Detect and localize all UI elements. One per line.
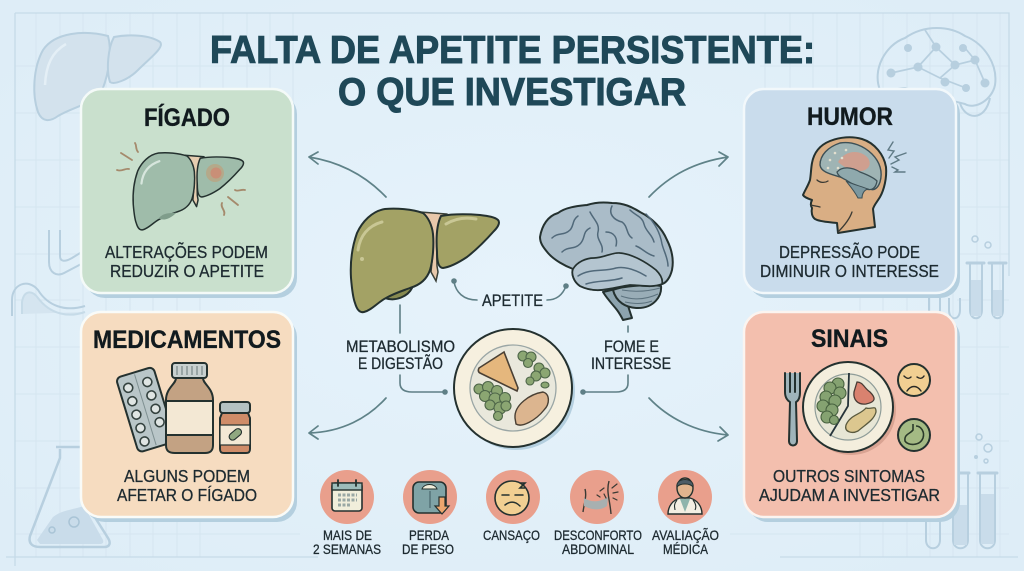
label: cansaço: CANSAÇO (483, 528, 540, 543)
icon: scale (403, 470, 457, 524)
label: apetite: APETITE (482, 292, 543, 310)
text: humor (760, 241, 939, 281)
connector: fome (580, 326, 628, 395)
central plate with food (454, 329, 575, 450)
title (210, 29, 815, 114)
text: medicamentos: AFETAR O FÍGADO (117, 485, 257, 505)
background icon: stomach (12, 230, 85, 316)
background icon: test tubes bottom (926, 434, 997, 548)
panel: fígado (81, 89, 297, 298)
text: fígado: ALTERAÇÕES PODEM (105, 241, 268, 262)
label: metabolismo e digestão: E DIGESTÃO (358, 353, 443, 373)
label: desconforto abdominal: DESCONFORTO (554, 528, 642, 543)
label: metabolismo e digestão (346, 338, 455, 373)
background icon: brain network (878, 28, 995, 116)
background icon: flask (30, 447, 110, 547)
central liver (351, 209, 499, 312)
label: perda de peso: PERDA (409, 528, 449, 543)
text: medicamentos (117, 466, 257, 505)
label: fome e interesse: INTERESSE (591, 355, 671, 373)
text: medicamentos: ALGUNS PODEM (124, 466, 250, 486)
background icon: test tubes top (929, 236, 1006, 318)
icon: medication (116, 363, 250, 453)
icon: sad face (898, 364, 930, 396)
text: sinais: OUTROS SINTOMAS (773, 466, 925, 486)
heading: medicamentos: MEDICAMENTOS (93, 326, 281, 354)
title: O QUE INVESTIGAR (338, 71, 686, 114)
label: mais de 2 semanas: MAIS DE (323, 528, 372, 543)
icon: tired face (486, 470, 540, 524)
icon: abdominal discomfort (570, 470, 624, 524)
panel: humor (744, 89, 960, 298)
label: fome e interesse (591, 338, 671, 373)
icon: head with brain (803, 137, 906, 233)
text: sinais (759, 466, 940, 505)
icon: stomach badge (898, 419, 930, 451)
label: mais de 2 semanas: 2 SEMANAS (313, 542, 381, 557)
icon: fork (785, 373, 800, 446)
heading: sinais: SINAIS (811, 325, 888, 353)
label: avaliação médica: MÉDICA (663, 542, 708, 557)
label: metabolismo e digestão: METABOLISMO (346, 338, 455, 356)
title: FALTA DE APETITE PERSISTENTE: (210, 29, 815, 72)
text: sinais: AJUDAM A INVESTIGAR (759, 485, 940, 505)
icon: liver with lesion (117, 143, 245, 230)
connector: metabolismo (400, 305, 448, 395)
text: fígado: REDUZIR O APETITE (110, 261, 264, 281)
label: perda de peso: DE PESO (402, 542, 454, 557)
icon: divided plate (803, 362, 896, 455)
central brain (540, 202, 673, 320)
heading: humor: HUMOR (807, 103, 893, 131)
arrow: to humor (649, 152, 728, 197)
arrow: to fígado (309, 152, 386, 197)
label: avaliação médica: AVALIAÇÃO (652, 528, 719, 543)
label: desconforto abdominal: ABDOMINAL (562, 542, 634, 557)
label: avaliação médica (652, 528, 719, 557)
background icon: liver (34, 33, 161, 120)
text: humor: DIMINUIR O INTERESSE (760, 261, 939, 281)
label: mais de 2 semanas (313, 528, 381, 557)
arrow: to medicamentos (309, 398, 386, 439)
connector: apetite (451, 278, 569, 300)
text: humor: DEPRESSÃO PODE (779, 241, 920, 262)
panel: medicamentos (81, 312, 297, 522)
text: fígado (105, 241, 268, 281)
heading: fígado: FÍGADO (144, 103, 230, 132)
label: desconforto abdominal (554, 528, 642, 557)
label: perda de peso (402, 528, 454, 557)
icon: doctor (658, 470, 712, 524)
panel: sinais (744, 312, 960, 522)
icon: calendar (320, 470, 374, 524)
arrow: to sinais (649, 398, 728, 441)
label: fome e interesse: FOME E (604, 338, 659, 356)
